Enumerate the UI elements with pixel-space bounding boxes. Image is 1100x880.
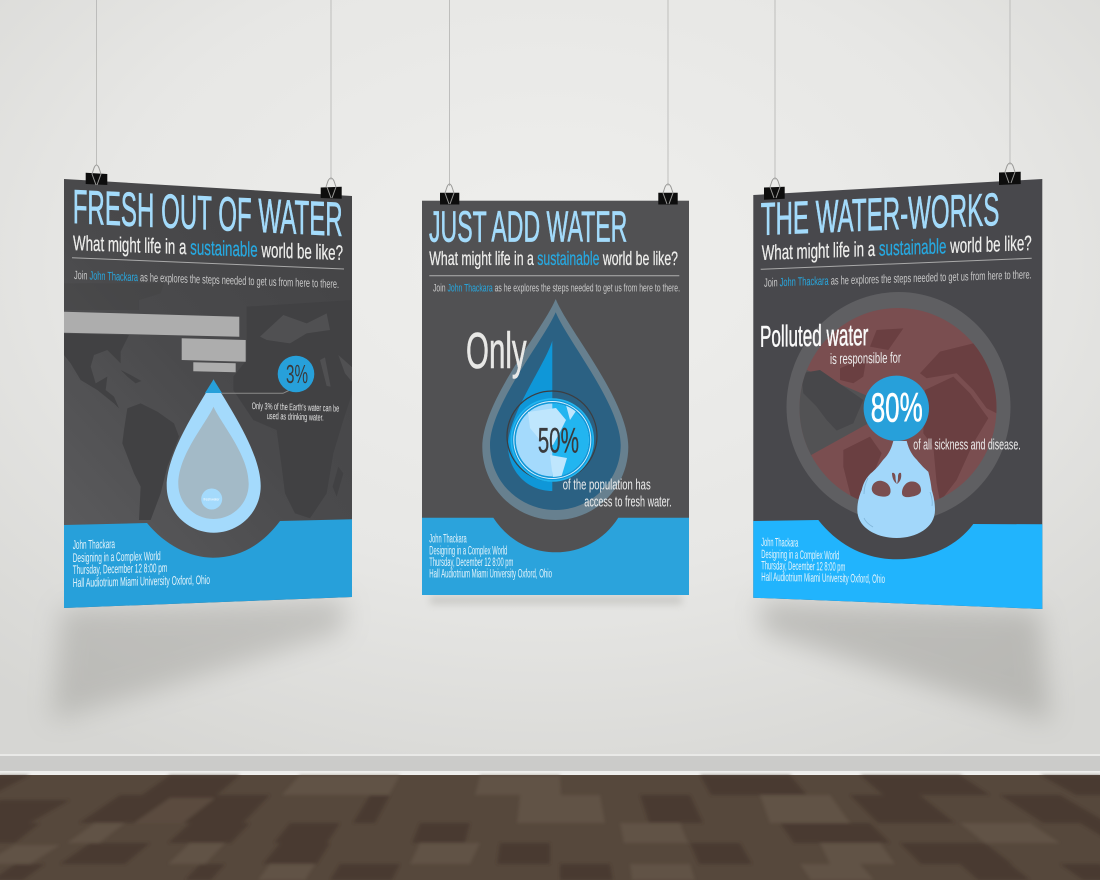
poster 1: Fresh out of water — [64, 179, 353, 608]
poster 1 subtitle: What might life in a sustainable world be like? — [73, 232, 343, 265]
poster 3 event details — [761, 535, 885, 586]
poster 1 event details: John Thackara — [73, 537, 115, 552]
poster 2 rule — [429, 275, 679, 277]
poster 2 event details — [429, 534, 552, 580]
3% caption: used as drinking water. — [267, 411, 324, 424]
3% circle: 3% — [286, 359, 308, 389]
poster 1 world map — [64, 314, 352, 520]
poster 1 event details: Thursday, December 12 8:00 pm — [73, 561, 167, 577]
hazard circle with map — [786, 292, 1010, 522]
poster 2 event details: Designing in a Complex World — [429, 545, 507, 557]
binder clips — [86, 163, 1021, 204]
baseboard — [0, 754, 1100, 776]
poster 3 event details: Hall Audiotrium Miami University Oxford, Ohio — [761, 570, 885, 586]
blue wave band — [422, 518, 689, 595]
poster 2: Just add water — [422, 201, 689, 595]
poster 3: The water-works — [753, 179, 1042, 609]
poster 3 event details: Designing in a Complex World — [761, 547, 839, 562]
3% circle — [278, 356, 314, 392]
poster 1 title: FRESH OUT OF WATER — [73, 181, 343, 247]
poster 2 event details: Thursday, December 12 8:00 pm — [429, 557, 513, 569]
text: of all sickness and disease: of all sickness and disease. — [913, 436, 1021, 453]
poster 2 title: JUST ADD WATER — [429, 203, 627, 252]
wood floor — [0, 775, 1100, 880]
poster 3 rule — [761, 258, 1032, 269]
80% circle — [864, 376, 929, 441]
poster 2 intro line: Join John Thackara as he explores the steps needed to get us from here to there. — [433, 283, 680, 295]
poster 1 event details: Hall Audiotrium Miami University Oxford, Ohio — [73, 573, 210, 590]
3% caption — [252, 401, 339, 424]
3% callout line — [222, 390, 290, 393]
poster 2 event details: John Thackara — [429, 534, 467, 546]
poster 3 event details: John Thackara — [761, 535, 798, 550]
icon: water drop — [167, 380, 261, 533]
blue wave band — [64, 519, 352, 608]
poster 1 rule — [72, 258, 344, 269]
poster 3 event details: Thursday, December 12 8:00 pm — [761, 558, 845, 574]
poster 3 background — [753, 179, 1042, 609]
poster 2 caption: of the population has — [563, 476, 651, 493]
poster 1 event details — [73, 537, 210, 590]
icon: large water drop with globe — [482, 299, 628, 520]
icon: skull drop — [857, 441, 935, 538]
blue wave band — [753, 520, 1042, 609]
text: is responsible for: is responsible for — [830, 350, 901, 368]
80% circle: 80% — [871, 385, 923, 431]
poster 2 caption — [563, 476, 672, 511]
text: 50%: 50% — [538, 422, 579, 461]
icon: faucet — [64, 312, 246, 372]
poster 3 subtitle: What might life in a sustainable world be like? — [762, 232, 1032, 265]
text: Polluted water: Polluted water — [760, 319, 868, 354]
poster shadows on wall — [52, 596, 1050, 722]
text: Only: Only — [466, 322, 527, 379]
poster 1 background — [64, 179, 352, 608]
poster 2 subtitle: What might life in a sustainable world be like? — [429, 249, 678, 270]
3% caption: Only 3% of the Earth's water can be — [252, 401, 339, 415]
poster 1 event details: Designing in a Complex World — [73, 549, 161, 565]
hanging strings — [96, 0, 1010, 186]
poster 1 intro line: Join John Thackara as he explores the steps needed to get us from here to there. — [74, 268, 339, 291]
poster 2 event details: Hall Audiotrium Miami University Oxford, Ohio — [429, 568, 552, 580]
icon: water drop: freshwater — [204, 496, 220, 502]
poster 2 caption: access to fresh water. — [584, 494, 672, 511]
poster 2 background — [422, 201, 689, 595]
